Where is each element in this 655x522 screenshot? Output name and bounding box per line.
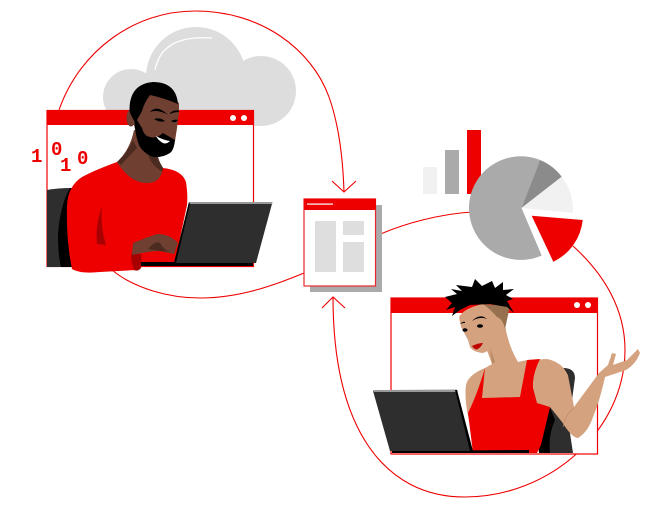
- laptop: [392, 450, 529, 453]
- panel: right window: [391, 298, 598, 454]
- panel: report document: [304, 198, 376, 286]
- red top: [468, 359, 550, 453]
- ear: [126, 110, 136, 126]
- chair: [47, 188, 71, 267]
- head: [134, 90, 179, 150]
- eyes and brows: [150, 109, 179, 115]
- hair: [445, 279, 514, 316]
- bar chart: [423, 130, 481, 194]
- beard: [134, 120, 175, 157]
- eyes and brows: [460, 316, 487, 324]
- sleeve fold: [97, 207, 106, 245]
- binary digits: 1: [31, 146, 42, 168]
- binary digits: [31, 139, 88, 177]
- hand: [132, 234, 178, 255]
- report shadow: [310, 205, 382, 292]
- figure: woman at laptop: [373, 279, 640, 453]
- pie chart: [469, 156, 583, 262]
- face: [459, 304, 505, 353]
- panel: left window: [47, 110, 254, 266]
- laptop: [141, 262, 253, 266]
- binary digits: 1: [60, 155, 71, 177]
- binary digits: 0: [51, 139, 62, 161]
- shaved side: [483, 304, 510, 329]
- red sweater: [67, 162, 187, 273]
- skin body: [466, 325, 640, 438]
- arrow: top curve to report: [59, 11, 356, 192]
- smile: [156, 136, 170, 143]
- neck shadow: [490, 348, 495, 364]
- figure: man at laptop: [47, 82, 272, 273]
- arrow: curve from report to pie: [376, 212, 472, 236]
- arrow: large curve from pie to report: [322, 246, 625, 497]
- neck: [117, 130, 172, 190]
- lips: [472, 343, 483, 350]
- arrow: curve from analyst window to report: [112, 270, 304, 298]
- arm crease: [563, 408, 574, 427]
- binary digits: 0: [77, 148, 88, 170]
- hair: [129, 82, 178, 122]
- cuff: [131, 254, 142, 271]
- icon: cloud: [103, 27, 296, 127]
- chair: [539, 368, 575, 453]
